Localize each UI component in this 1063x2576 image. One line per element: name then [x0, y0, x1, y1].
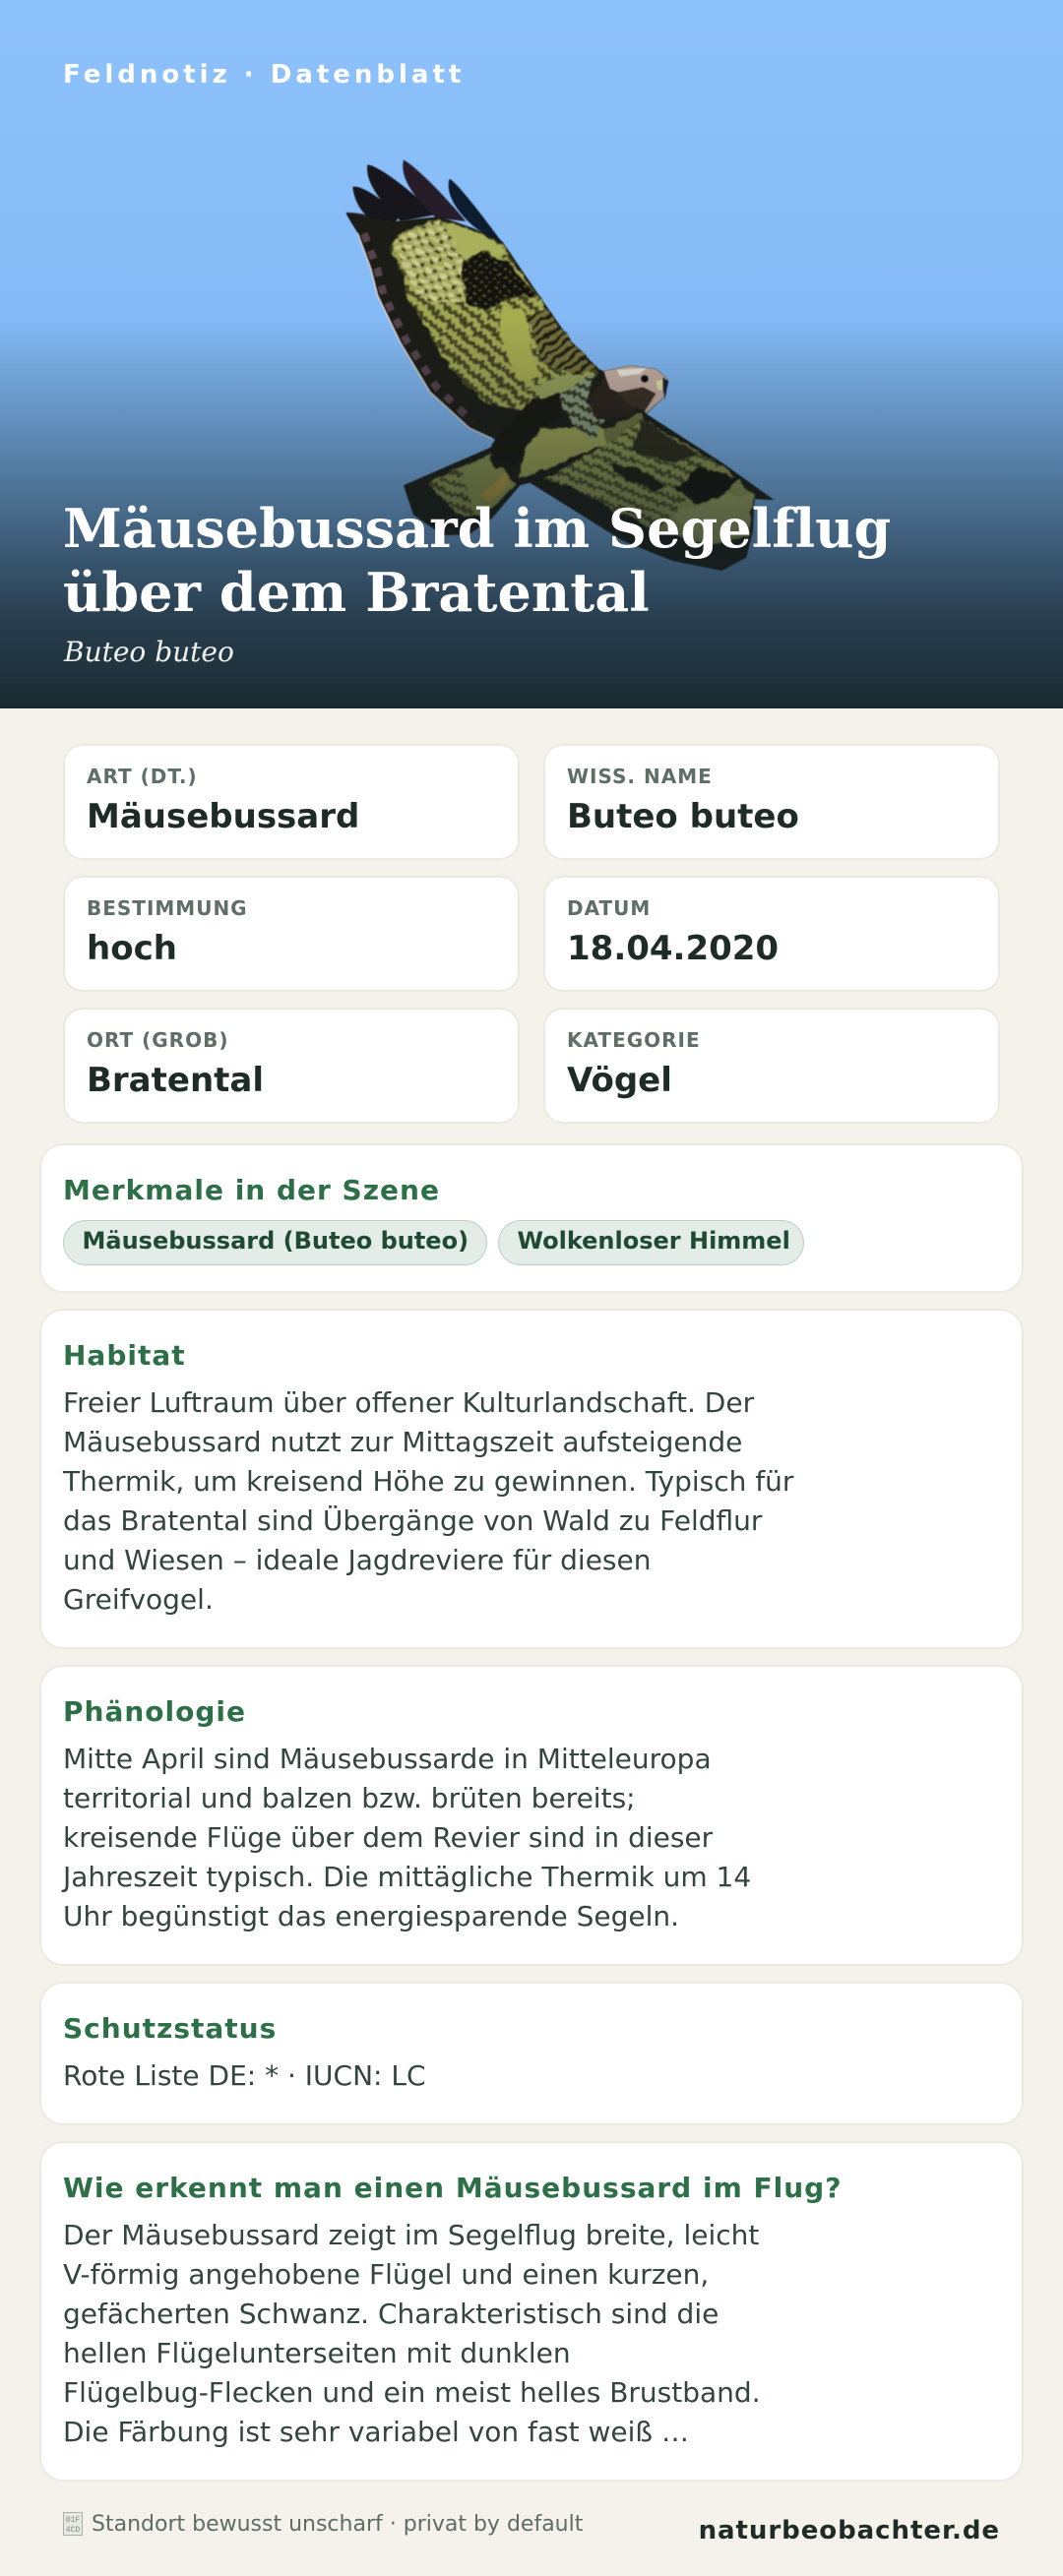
fact card: Art — [63, 744, 520, 860]
body text: territorial und balzen bzw. brüten bereits; — [63, 1782, 636, 1814]
fact card: Kategorie: Vögel — [567, 1061, 672, 1100]
fact card: Art: Mäusebussard — [87, 797, 359, 836]
title: Mäusebussard im Segelflug — [63, 497, 891, 560]
heading: Schutzstatus — [63, 2012, 277, 2045]
heading: Habitat — [63, 1339, 186, 1372]
fact card: Ort: ORT (GROB) — [87, 1028, 228, 1052]
fact card: Kategorie: KATEGORIE — [567, 1028, 701, 1052]
body text: das Bratental sind Übergänge von Wald zu Feldflur — [63, 1504, 762, 1537]
near wing plumage — [391, 219, 597, 410]
body text: V-förmig angehobene Flügel und einen kurzen, — [63, 2258, 709, 2291]
tag: Wolkenloser Himmel — [498, 1220, 804, 1265]
bird silhouette base — [346, 214, 775, 571]
head — [588, 366, 668, 420]
primary feather tips — [346, 160, 512, 256]
body text: Freier Luftraum über offener Kulturlandschaft. Der — [63, 1386, 754, 1419]
body text: Der Mäusebussard zeigt im Segelflug breite, leicht — [63, 2219, 759, 2251]
panel: Phänologie — [39, 1665, 1024, 1966]
fact card: Datum — [543, 876, 1000, 992]
body text: Thermik, um kreisend Höhe zu gewinnen. Typisch für — [63, 1465, 793, 1498]
panel: Habitat — [39, 1309, 1024, 1649]
icon: missing-glyph box: 01F — [66, 2516, 80, 2525]
body text: gefächerten Schwanz. Charakteristisch sind die — [63, 2298, 719, 2330]
fact card: Bestimmung: BESTIMMUNG — [87, 896, 248, 920]
footer note — [63, 2512, 583, 2537]
tag: Wolkenloser Himmel: Wolkenloser Himmel — [518, 1227, 790, 1255]
kicker: Feldnotiz · Datenblatt — [63, 60, 465, 90]
body text: Flügelbug-Flecken und ein meist helles Brustband. — [63, 2376, 761, 2409]
tag: Mäusebussard — [63, 1220, 487, 1265]
body text: Jahreszeit typisch. Die mittägliche Thermik um 14 — [63, 1861, 751, 1893]
panel: Wie erkennt man einen Mäusebussard im Flug? — [39, 2141, 1024, 2482]
textured plumage — [391, 219, 753, 544]
fact card: wissenschaftlicher Name: Buteo buteo — [567, 797, 799, 836]
body plumage — [489, 374, 645, 479]
body text: Greifvogel. — [63, 1583, 214, 1616]
tail plumage — [428, 453, 516, 517]
body text: Rote Liste DE: * · IUCN: LC — [63, 2059, 426, 2092]
dark gradient overlay — [0, 0, 1063, 708]
bird illustration: soaring buzzard — [345, 159, 775, 571]
fact card: wissenschaftlicher Name — [543, 744, 1000, 860]
note text: Standort bewusst unscharf · privat by default — [92, 2512, 583, 2537]
fact card: Ort — [63, 1008, 520, 1124]
icon: missing-glyph box — [63, 2512, 83, 2536]
body text: und Wiesen – ideale Jagdreviere für diesen — [63, 1544, 652, 1576]
heading: Phänologie — [63, 1695, 246, 1728]
panel: Schutzstatus — [39, 1982, 1024, 2125]
scientific name subtitle: Buteo buteo — [64, 636, 234, 668]
fact card: Art: ART (DT.) — [87, 765, 198, 788]
body text — [63, 2219, 761, 2448]
fact card: Ort: Bratental — [87, 1061, 264, 1100]
fact card: Kategorie — [543, 1008, 1000, 1124]
body text: Uhr begünstigt das energiesparende Segeln. — [63, 1900, 679, 1932]
fact card: Datum: DATUM — [567, 896, 651, 920]
body text: Die Färbung ist sehr variabel von fast weiß … — [63, 2416, 689, 2448]
body text: hellen Flügelunterseiten mit dunklen — [63, 2337, 571, 2369]
body text: Mäusebussard nutzt zur Mittagszeit aufsteigende — [63, 1426, 742, 1458]
footer brand: naturbeobachter.de — [699, 2516, 1000, 2545]
heading: Merkmale in der Szene — [63, 1174, 440, 1206]
icon: missing-glyph box: 4CD — [66, 2526, 80, 2535]
far wing plumage — [544, 420, 753, 544]
fact card: Datum: 18.04.2020 — [567, 929, 779, 968]
body text — [63, 1386, 793, 1616]
body text: kreisende Flüge über dem Revier sind in dieser — [63, 1821, 713, 1854]
panel: Merkmale in der Szene — [39, 1143, 1024, 1293]
title — [63, 497, 891, 624]
body text — [61, 1743, 751, 1932]
body text: Mitte April sind Mäusebussarde in Mitteleuropa — [63, 1743, 712, 1775]
tag: Mäusebussard: Mäusebussard (Buteo buteo) — [83, 1227, 469, 1255]
fact card: Bestimmung — [63, 876, 520, 992]
fact card: wissenschaftlicher Name: WISS. NAME — [567, 765, 713, 788]
hero photo panel — [0, 0, 1063, 708]
title: über dem Bratental — [63, 561, 650, 624]
fact card: Bestimmung: hoch — [87, 929, 177, 968]
carpal patch — [461, 251, 534, 312]
heading: Wie erkennt man einen Mäusebussard im Flug? — [63, 2172, 842, 2204]
